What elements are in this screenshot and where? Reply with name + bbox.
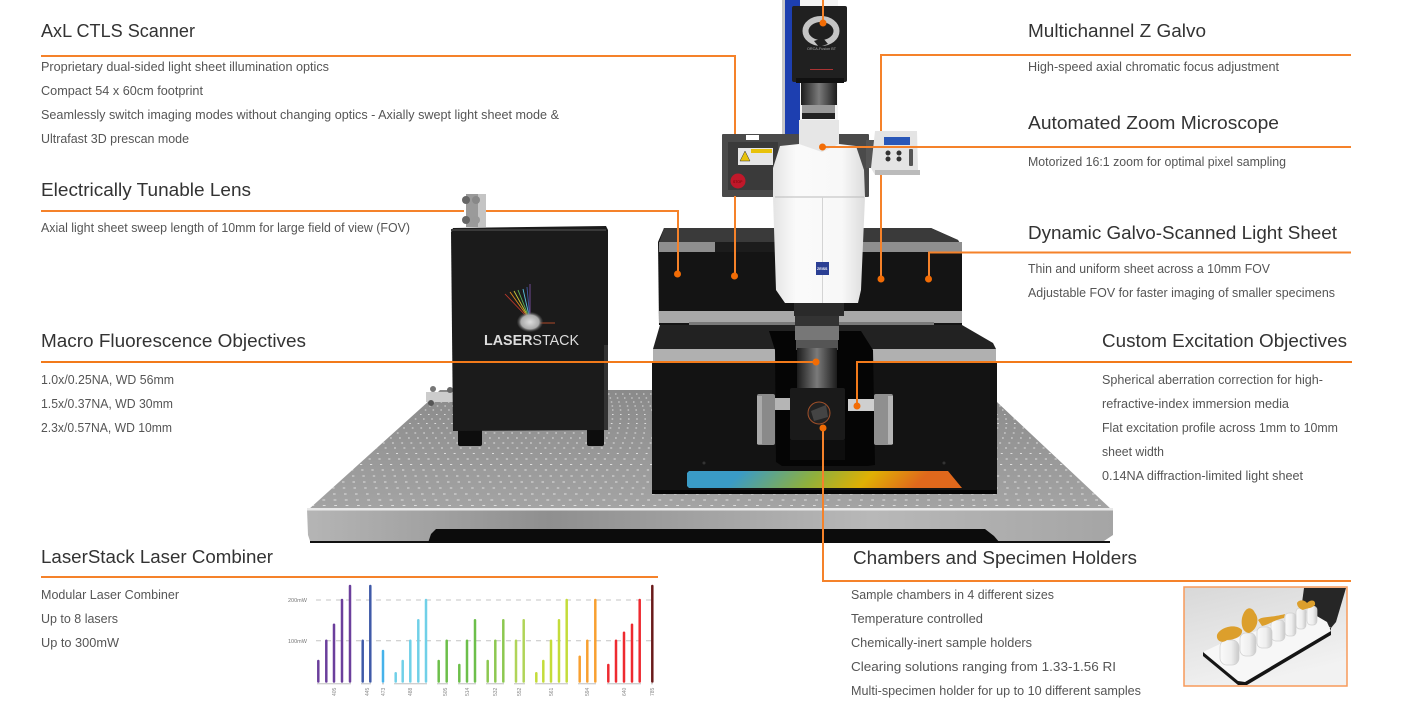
vertical stage rail — [782, 0, 838, 135]
heading: AxL CTLS Scanner: AxL CTLS Scanner — [41, 21, 195, 41]
sCMOS camera: ORCA-Fusion BT — [807, 46, 837, 51]
text block: light sheet details: Adjustable FOV for faster imaging of smaller specimens — [1028, 286, 1335, 300]
text block: combiner details — [41, 588, 179, 650]
text block: scanner details — [41, 60, 560, 146]
bar chart: laser power by wavelength: 785 — [650, 687, 656, 696]
leader dot: chambers — [820, 424, 826, 432]
bar chart: laser power by wavelength: 100mW — [288, 639, 308, 645]
leader dot: scanner — [731, 272, 738, 280]
bar chart: laser power by wavelength: 532 — [493, 687, 499, 696]
leader dot: zoom microscope — [819, 144, 826, 150]
LaserStack logo: LASERSTACK — [484, 332, 579, 349]
text block: zoom detail: Motorized 16:1 zoom for optimal pixel sampling — [1028, 155, 1286, 169]
upper scanner housing — [658, 228, 962, 326]
text block: chamber details: Clearing solutions ranging from 1.33-1.56 RI — [851, 660, 1116, 674]
text block: excitation details — [1102, 373, 1338, 483]
callout: camera top dot — [820, 0, 826, 26]
text block: chamber details: Multi-specimen holder for up to 10 different samples — [851, 684, 1141, 698]
heading: Chambers and Specimen Holders: Chambers and Specimen Holders — [853, 548, 1137, 568]
bar chart: laser power by wavelength: 552 — [517, 687, 523, 696]
text block: Z galvo detail: High-speed axial chromatic focus adjustment — [1028, 60, 1280, 74]
callout: Automated Zoom Microscope — [819, 113, 1351, 169]
bar chart: laser power by wavelength: 488 — [408, 687, 414, 696]
leader line: scanner — [41, 56, 735, 276]
heading: LaserStack Laser Combiner: LaserStack Laser Combiner — [41, 547, 273, 567]
text block: excitation details: 0.14NA diffraction-limited light sheet — [1102, 469, 1304, 483]
heading: Multichannel Z Galvo: Multichannel Z Galvo — [1028, 21, 1206, 41]
text block: chamber details: Sample chambers in 4 different sizes — [851, 588, 1054, 602]
bar chart: laser power by wavelength — [288, 586, 656, 696]
text block: objective specs: 1.0x/0.25NA, WD 56mm — [41, 373, 174, 387]
text block: chamber details: Temperature controlled — [851, 612, 983, 626]
sCMOS camera — [792, 6, 847, 119]
leader line: chambers — [823, 428, 1351, 581]
bar chart: laser power by wavelength: 514 — [465, 687, 471, 696]
leader line: Z galvo — [881, 55, 1351, 279]
text block: combiner details: Modular Laser Combiner — [41, 588, 179, 602]
gray control box with stop button — [722, 134, 869, 197]
white zoom microscope body: ZEISS — [817, 267, 828, 271]
text block: light sheet details: Thin and uniform sheet across a 10mm FOV — [1028, 262, 1271, 276]
objective and specimen chamber — [757, 298, 893, 460]
product photo: instrument on optical table — [300, 0, 1120, 543]
callout: Dynamic Galvo-Scanned Light Sheet — [925, 223, 1351, 300]
heading: Macro Fluorescence Objectives: Macro Fluorescence Objectives — [41, 331, 306, 351]
callout: Macro Fluorescence Objectives — [41, 331, 820, 435]
text block: scanner details: Ultrafast 3D prescan mode — [41, 132, 189, 146]
leader dot: Z galvo — [878, 276, 884, 282]
text block: chamber details: Chemically-inert sample holders — [851, 636, 1032, 650]
LaserStack logo — [484, 284, 579, 349]
white zoom microscope body — [773, 120, 865, 303]
bar chart: laser power by wavelength: 405 — [332, 687, 338, 696]
leader dot: macro objectives — [812, 358, 820, 366]
bar chart: laser power by wavelength: 445 — [365, 687, 371, 696]
callout: AxL CTLS Scanner — [41, 21, 738, 280]
text block: scanner details: Proprietary dual-sided light sheet illumination optics — [41, 60, 329, 74]
heading: Electrically Tunable Lens: Electrically Tunable Lens — [41, 180, 251, 200]
zoom controller — [866, 131, 920, 175]
leader dot: light sheet — [925, 276, 932, 282]
callout: Chambers and Specimen Holders — [820, 424, 1351, 698]
table fittings at rear left — [426, 386, 454, 406]
leader line: macro objectives — [41, 361, 816, 363]
bar chart: laser power by wavelength: 473 — [381, 687, 387, 696]
gray control box with stop button: STOP — [733, 180, 743, 184]
text block: excitation details: sheet width — [1102, 445, 1164, 459]
leader line: excitation objectives — [857, 362, 1352, 405]
optical breadboard table — [300, 390, 1120, 543]
bar chart: laser power by wavelength: 505 — [443, 687, 449, 696]
text block: excitation details: Spherical aberration correction for high- — [1102, 373, 1323, 387]
laser combiner box — [451, 194, 608, 446]
callout: Custom Excitation Objectives — [854, 331, 1352, 483]
bar chart: laser power by wavelength: 561 — [549, 687, 555, 696]
text block: objective specs: 2.3x/0.57NA, WD 10mm — [41, 421, 172, 435]
text block: chamber details — [851, 588, 1141, 698]
callout: Multichannel Z Galvo — [878, 21, 1351, 282]
bar chart: laser power by wavelength: 640 — [622, 687, 628, 696]
inset photo: multi-specimen holder — [1184, 587, 1347, 686]
callout: LaserStack Laser Combiner — [41, 547, 658, 650]
leader line: tunable lens — [41, 211, 678, 274]
text block: scanner details: Compact 54 x 60cm footprint — [41, 84, 204, 98]
leader line: zoom microscope — [822, 146, 1351, 148]
text block: combiner details: Up to 300mW — [41, 636, 119, 650]
text block: excitation details: Flat excitation profile across 1mm to 10mm — [1102, 421, 1338, 435]
leader line: light sheet — [929, 252, 1351, 279]
bar chart: laser power by wavelength: 200mW — [288, 598, 308, 604]
heading: Automated Zoom Microscope: Automated Zoom Microscope — [1028, 113, 1279, 133]
callout: Electrically Tunable Lens — [41, 180, 681, 278]
bar chart: laser power by wavelength: 594 — [585, 687, 591, 696]
heading: Custom Excitation Objectives: Custom Excitation Objectives — [1102, 331, 1347, 351]
text block: tunable lens details: Axial light sheet sweep length of 10mm for large field of view (FOV) — [41, 221, 410, 235]
heading: Dynamic Galvo-Scanned Light Sheet: Dynamic Galvo-Scanned Light Sheet — [1028, 223, 1337, 243]
leader dot: excitation objectives — [854, 402, 860, 410]
leader dot: tunable lens — [674, 270, 681, 278]
text block: excitation details: refractive-index immersion media — [1102, 397, 1289, 411]
rainbow spectrum bar — [687, 471, 962, 488]
text block: combiner details: Up to 8 lasers — [41, 612, 118, 626]
text block: light sheet details — [1028, 262, 1335, 300]
text block: objective specs: 1.5x/0.37NA, WD 30mm — [41, 397, 173, 411]
lower chamber housing — [652, 325, 997, 494]
divider rule: combiner — [41, 576, 658, 578]
text block: scanner details: Seamlessly switch imaging modes without changing optics - Axially swept light sheet mode & — [41, 108, 560, 122]
text block: objective specs — [41, 373, 174, 435]
